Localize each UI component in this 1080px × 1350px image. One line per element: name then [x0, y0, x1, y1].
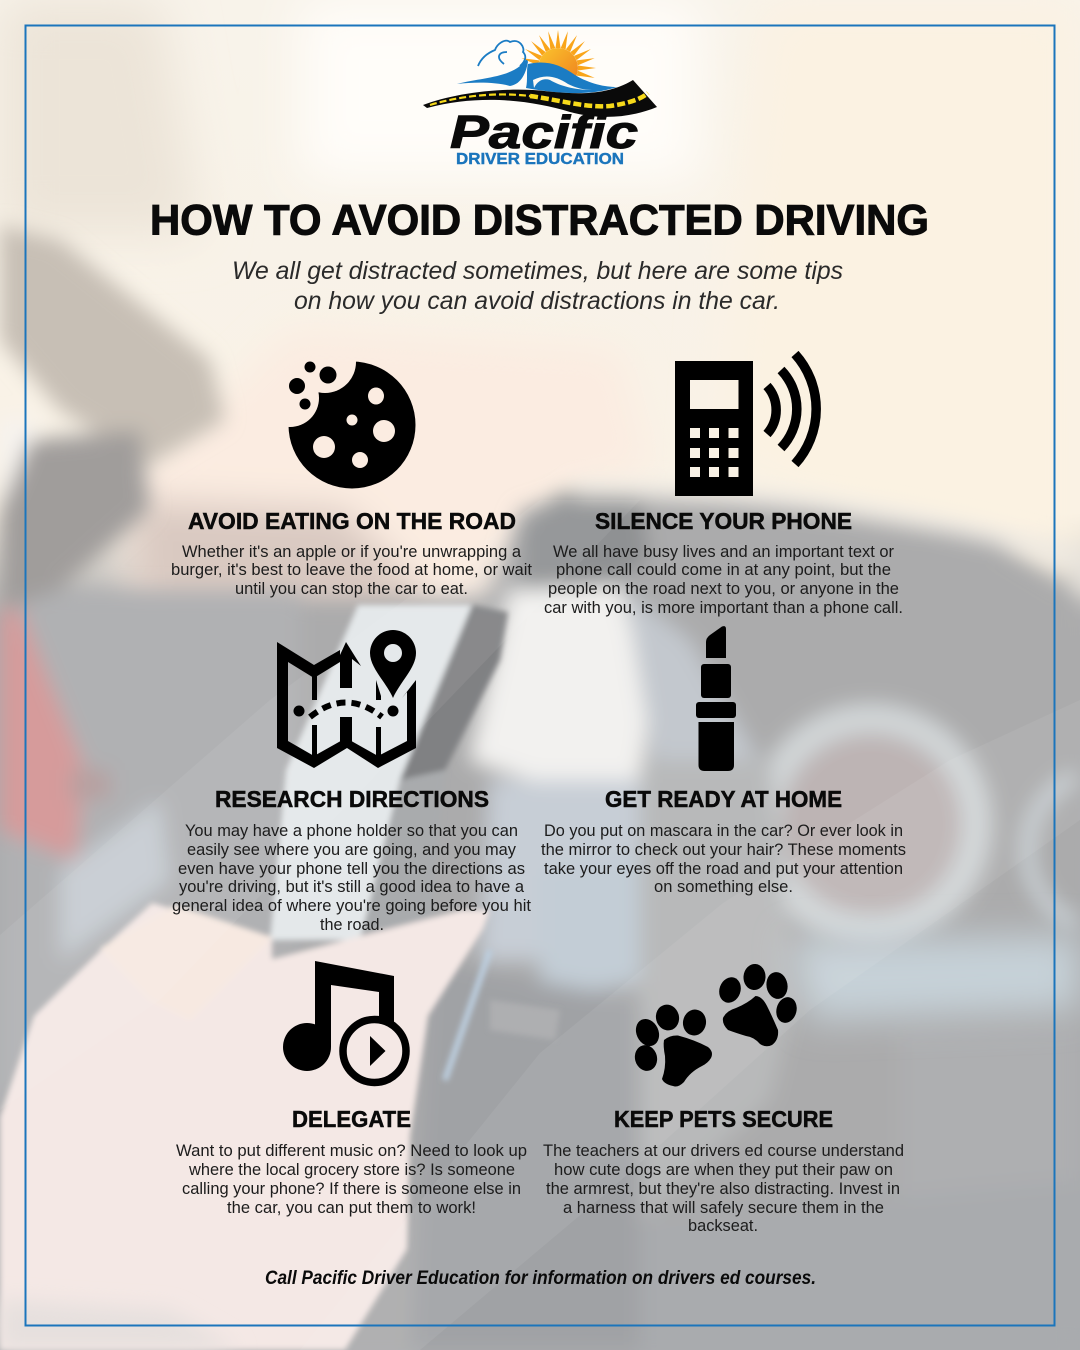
icon: phone with signal waves: [675, 354, 816, 496]
body text: [171, 543, 532, 598]
body text: [541, 822, 906, 896]
body text: [544, 543, 903, 617]
heading: RESEARCH DIRECTIONS: [215, 786, 489, 812]
tip: avoid eating on the road: [171, 350, 532, 598]
icon: bitten cookie: [288, 362, 416, 488]
body text: where the local grocery store is? Is someone: [188, 1161, 515, 1179]
icon: lipstick: [696, 626, 736, 771]
body text: take your eyes off the road and put your attention: [544, 860, 903, 878]
heading: SILENCE YOUR PHONE: [595, 508, 852, 534]
body text: [172, 822, 531, 934]
body text: You may have a phone holder so that you can: [185, 822, 518, 840]
body text: Want to put different music on? Need to look up: [176, 1142, 527, 1160]
body text: The teachers at our drivers ed course understand: [543, 1142, 904, 1160]
subtitle: We all get distracted sometimes, but here are some tips: [232, 257, 843, 285]
body text: backseat.: [688, 1217, 758, 1235]
footer call to action: Call Pacific Driver Education for information on drivers ed courses.: [265, 1268, 816, 1289]
body text: a harness that will safely secure them in the: [563, 1199, 884, 1217]
logo cloud and waves: [457, 41, 617, 93]
body text: [176, 1142, 527, 1217]
body text: how cute dogs are when they put their paw on: [554, 1161, 893, 1179]
body text: people on the road next to you, or anyone in the: [548, 580, 899, 598]
tip: silence your phone: [544, 354, 903, 617]
logo tagline: DRIVER EDUCATION: [456, 151, 624, 168]
icon: music note with play button: [283, 961, 406, 1082]
body text: you're driving, but it's still a good idea to have a: [179, 878, 525, 896]
body text: burger, it's best to leave the food at home, or wait: [171, 561, 532, 579]
tip: keep pets secure: [543, 963, 904, 1235]
body text: the mirror to check out your hair? These moments: [541, 841, 906, 859]
subtitle: [232, 257, 843, 315]
heading: KEEP PETS SECURE: [614, 1106, 833, 1132]
heading: AVOID EATING ON THE ROAD: [188, 508, 516, 534]
body text: even have your phone tell you the directions as: [178, 860, 525, 878]
logo road: [423, 80, 657, 117]
logo sun: [521, 30, 596, 89]
tip: delegate: [176, 961, 527, 1217]
subtitle: on how you can avoid distractions in the car.: [294, 287, 780, 315]
body text: on something else.: [654, 878, 793, 896]
icon: two paw prints: [632, 963, 800, 1086]
logo wordmark: Pacific: [450, 106, 638, 158]
tip: get ready at home: [541, 626, 906, 896]
body text: the road.: [320, 916, 384, 934]
body text: general idea of where you're going before you hit: [172, 897, 531, 915]
icon: folded map with pin: [277, 630, 416, 768]
heading: DELEGATE: [292, 1106, 411, 1132]
body text: [543, 1142, 904, 1235]
heading: GET READY AT HOME: [605, 786, 842, 812]
body text: easily see where you are going, and you may: [187, 841, 517, 859]
tip: research directions: [172, 630, 531, 934]
body text: Do you put on mascara in the car? Or ever look in: [544, 822, 903, 840]
logo: Pacific Driver Education: [423, 30, 657, 168]
body text: the armrest, but they're also distracting. Invest in: [546, 1180, 900, 1198]
body text: until you can stop the car to eat.: [235, 580, 468, 598]
body text: We all have busy lives and an important text or: [553, 543, 894, 561]
title: HOW TO AVOID DISTRACTED DRIVING: [150, 196, 929, 244]
body text: phone call could come in at any point, but the: [556, 561, 891, 579]
body text: Whether it's an apple or if you're unwrapping a: [182, 543, 522, 561]
body text: car with you, is more important than a phone call.: [544, 599, 903, 617]
body text: calling your phone? If there is someone else in: [182, 1180, 521, 1198]
body text: the car, you can put them to work!: [227, 1199, 476, 1217]
